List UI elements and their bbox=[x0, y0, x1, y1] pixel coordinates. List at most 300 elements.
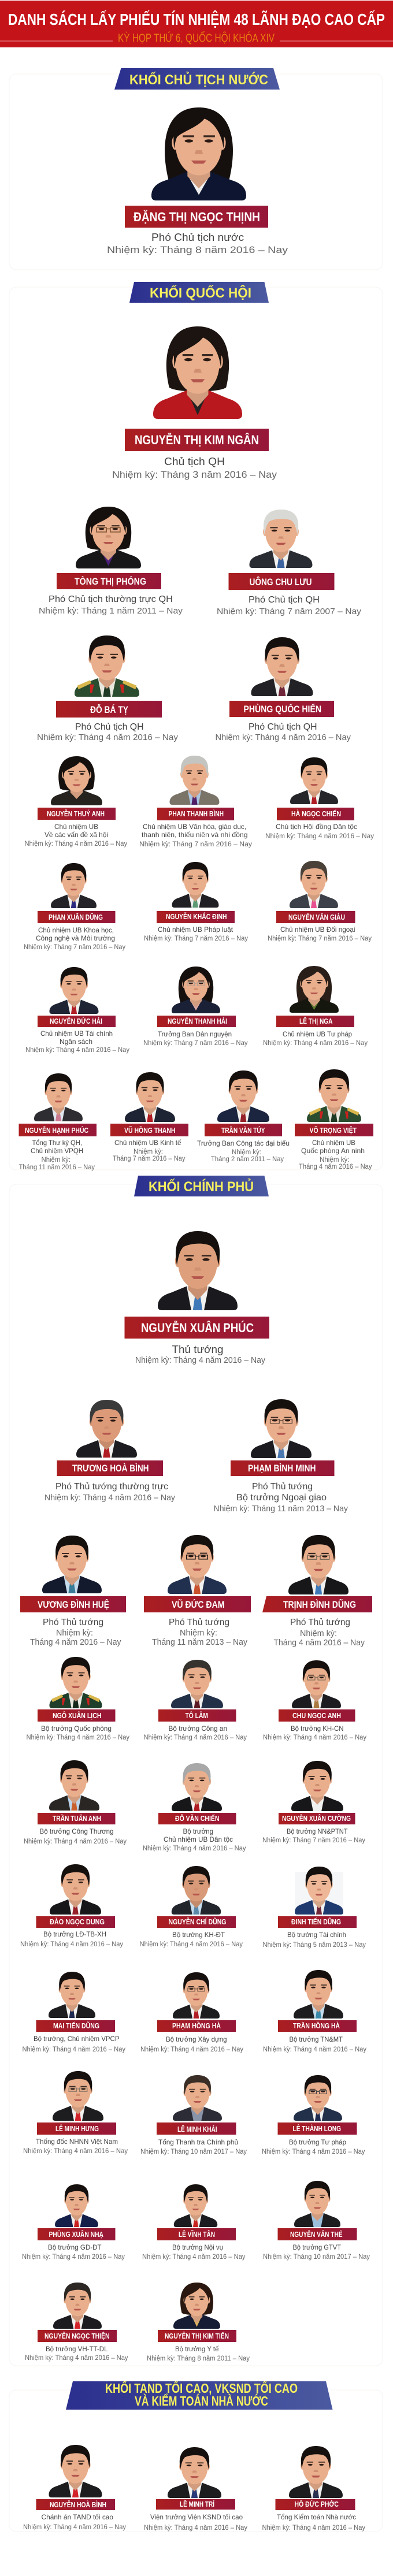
portrait bbox=[51, 756, 102, 805]
name bar bbox=[279, 1813, 355, 1824]
role and term bbox=[25, 2345, 128, 2362]
role and term bbox=[23, 2138, 128, 2155]
role and term bbox=[152, 1618, 247, 1647]
name bar: NGUYỄN ĐỨC HẢI bbox=[50, 1017, 102, 1025]
name bar bbox=[157, 2228, 236, 2240]
role and term: Trưởng Ban Dân nguyện bbox=[158, 1030, 232, 1038]
role and term: Nhiệm kỳ: Tháng 4 năm 2016 – Nay bbox=[142, 2254, 246, 2261]
role and term: Nhiệm kỳ: Tháng 4 năm 2016 – Nay bbox=[24, 841, 127, 847]
role and term: Nhiệm kỳ: bbox=[134, 1148, 163, 1155]
name bar bbox=[144, 1596, 251, 1612]
portrait bbox=[291, 1761, 343, 1811]
portrait bbox=[288, 1535, 348, 1594]
name bar bbox=[277, 2122, 357, 2135]
name bar bbox=[125, 429, 269, 451]
role and term: Nhiệm kỳ: bbox=[180, 1628, 217, 1638]
role and term: Chủ nhiệm UB Văn hóa, giáo dục, bbox=[143, 823, 246, 831]
portrait bbox=[49, 1972, 95, 2018]
role and term: Công nghệ và Môi trường bbox=[36, 934, 115, 942]
role and term bbox=[144, 925, 248, 942]
role and term bbox=[268, 925, 372, 942]
role and term: Chánh án TAND tối cao bbox=[42, 2513, 113, 2521]
name bar: PHÙNG XUÂN NHẠ bbox=[49, 2230, 103, 2239]
role and term: Trưởng Ban Công tác đại biểu bbox=[197, 1139, 290, 1147]
person: Nguyễn Hạnh Phúc bbox=[18, 1073, 97, 1171]
person: Phạm Hồng Hà bbox=[140, 1972, 243, 2053]
portrait bbox=[50, 1657, 102, 1708]
portrait bbox=[168, 1535, 227, 1594]
role and term: Nhiệm kỳ: Tháng 4 năm 2016 – Nay bbox=[143, 1734, 247, 1741]
portrait bbox=[290, 861, 338, 908]
section banner bbox=[129, 282, 269, 303]
role and term bbox=[143, 1724, 247, 1741]
name bar: NGUYỄN VĂN GIÀU bbox=[288, 913, 345, 921]
role and term bbox=[24, 823, 127, 847]
person: Võ Trọng Việt bbox=[295, 1069, 373, 1170]
role and term: Bộ trưởng GTVT bbox=[292, 2243, 342, 2251]
role and term: Chủ nhiệm UB bbox=[54, 823, 98, 831]
name bar: LÊ VĨNH TÂN bbox=[179, 2230, 215, 2239]
name bar bbox=[158, 1813, 236, 1824]
person: Lê Vĩnh Tân bbox=[142, 2184, 246, 2261]
role and term: Nhiệm kỳ: Tháng 4 năm 2016 – Nay bbox=[27, 1734, 129, 1741]
portrait bbox=[295, 1867, 343, 1915]
role and term bbox=[37, 722, 179, 742]
role and term bbox=[144, 2513, 247, 2532]
role and term bbox=[20, 1930, 123, 1948]
name bar bbox=[156, 2499, 235, 2510]
role and term: Chủ nhiệm UB Khoa học, bbox=[38, 926, 114, 934]
name bar: VÕ TRỌNG VIỆT bbox=[310, 1126, 357, 1135]
role and term: Nhiệm kỳ: Tháng 11 năm 2013 – Nay bbox=[214, 1504, 348, 1514]
role and term: Nhiệm kỳ: Tháng 7 năm 2016 – Nay bbox=[268, 935, 372, 942]
role and term: Bộ trưởng TN&MT bbox=[289, 2035, 343, 2043]
role and term: Nhiệm kỳ: Tháng 7 năm 2016 – Nay bbox=[24, 944, 125, 951]
role and term: Phó Thủ tướng bbox=[252, 1482, 313, 1492]
name bar: CHU NGỌC ANH bbox=[292, 1712, 341, 1720]
name bar: UÔNG CHU LƯU bbox=[250, 577, 312, 588]
role and term: Nhiệm kỳ: Tháng 4 năm 2016 – Nay bbox=[263, 2046, 366, 2053]
person: Mai Tiến Dũng bbox=[22, 1972, 125, 2053]
role and term: thanh niên, thiếu niên và nhi đồng bbox=[142, 831, 247, 839]
role and term bbox=[142, 2243, 246, 2261]
name bar: LÊ THÀNH LONG bbox=[292, 2124, 341, 2133]
name bar bbox=[277, 2228, 357, 2240]
portrait bbox=[50, 1864, 101, 1915]
role and term: Nhiệm kỳ: Tháng 4 năm 2016 – Nay bbox=[37, 733, 179, 742]
person: Nguyễn Xuân Phúc bbox=[125, 1231, 269, 1365]
section banner: KHỐI QUỐC HỘI bbox=[150, 285, 251, 301]
portrait bbox=[151, 107, 246, 200]
panel: Khối Quốc hội bbox=[9, 282, 383, 1171]
person: Trịnh Đình Dũng bbox=[262, 1535, 372, 1648]
role and term: Nhiệm kỳ: Tháng 4 năm 2016 – Nay bbox=[140, 2046, 243, 2053]
header band bbox=[0, 1, 393, 47]
role and term: Nhiệm kỳ: Tháng 4 năm 2016 – Nay bbox=[25, 2355, 128, 2362]
role and term: Nhiệm kỳ: Tháng 10 năm 2017 – Nay bbox=[263, 2254, 370, 2261]
person: Lê Thành Long bbox=[262, 2075, 365, 2155]
person: Lê Minh Khái bbox=[140, 2075, 247, 2155]
person: Đỗ Văn Chiến bbox=[143, 1763, 246, 1852]
name bar bbox=[38, 808, 116, 820]
portrait bbox=[251, 637, 313, 696]
person: Phùng Xuân Nhạ bbox=[22, 2184, 125, 2261]
role and term: Bộ trưởng Quốc phòng bbox=[41, 1724, 112, 1733]
portrait bbox=[173, 2283, 220, 2329]
person: Nguyễn Chí Dũng bbox=[140, 1866, 243, 1948]
person: Chu Ngọc Anh bbox=[263, 1660, 366, 1741]
panel: Khối Chủ tịch nước bbox=[9, 68, 383, 270]
person: Vương Đình Huệ bbox=[20, 1536, 126, 1647]
portrait bbox=[49, 2445, 102, 2497]
name bar: NGÔ XUÂN LỊCH bbox=[53, 1711, 102, 1720]
section banner: KHỐI TAND TỐI CAO, VKSND TỐI CAO bbox=[105, 2380, 298, 2396]
name bar: HÀ NGỌC CHIẾN bbox=[291, 809, 341, 818]
name bar bbox=[229, 573, 334, 590]
portrait bbox=[76, 507, 141, 568]
portrait bbox=[172, 1866, 221, 1915]
role and term: Nhiệm kỳ: Tháng 7 năm 2016 – Nay bbox=[262, 1837, 365, 1844]
role and term: Bộ trưởng bbox=[183, 1827, 213, 1835]
person: Trần Hồng Hà bbox=[263, 1970, 366, 2053]
role and term bbox=[140, 2138, 247, 2155]
role and term: Tháng 7 năm 2016 – Nay bbox=[113, 1155, 186, 1162]
person: Nguyễn Thanh Hải bbox=[143, 967, 248, 1047]
person: Lê Minh Trí bbox=[144, 2447, 247, 2532]
person: Nguyễn Thị Kim Tiến bbox=[147, 2283, 250, 2362]
name bar bbox=[229, 701, 334, 717]
role and term: Tháng 4 năm 2016 – Nay bbox=[299, 1164, 372, 1170]
role and term: Nhiệm kỳ: bbox=[56, 1628, 93, 1638]
role and term bbox=[113, 1139, 186, 1162]
role and term: Nhiệm kỳ: Tháng 4 năm 2016 – Nay bbox=[22, 2254, 125, 2261]
name bar bbox=[295, 1124, 373, 1136]
portrait bbox=[158, 1231, 238, 1310]
person: Phùng Quốc Hiển bbox=[215, 637, 351, 742]
role and term: Nhiệm kỳ: Tháng 7 năm 2016 – Nay bbox=[143, 1040, 248, 1047]
role and term bbox=[263, 1030, 368, 1047]
person: Đinh Tiến Dũng bbox=[262, 1867, 366, 1949]
role and term: Bộ trưởng Công an bbox=[169, 1724, 227, 1733]
name bar bbox=[18, 1124, 97, 1136]
name bar bbox=[279, 1709, 355, 1722]
role and term: Phó Thủ tướng bbox=[290, 1618, 350, 1627]
person: Trương Hòa Bình bbox=[45, 1400, 175, 1503]
role and term: Tháng 2 năm 2011 – Nay bbox=[211, 1156, 284, 1163]
person: Đỗ Bá Tỵ bbox=[37, 635, 179, 742]
name bar bbox=[38, 2330, 117, 2342]
portrait bbox=[250, 510, 312, 568]
role and term: Nhiệm kỳ: Tháng 4 năm 2016 – Nay bbox=[23, 2524, 126, 2531]
person: Nguyễn Thúy Anh bbox=[24, 756, 127, 847]
role and term: Nhiệm kỳ: bbox=[232, 1149, 261, 1156]
name bar bbox=[205, 1124, 282, 1136]
name bar: VŨ ĐỨC ĐAM bbox=[172, 1599, 224, 1610]
role and term bbox=[147, 2345, 250, 2362]
role and term: Nhiệm kỳ: Tháng 4 năm 2016 – Nay bbox=[22, 2046, 125, 2053]
name bar: ĐÀO NGỌC DUNG bbox=[50, 1917, 105, 1926]
role and term bbox=[274, 1618, 365, 1648]
name bar: TÔ LÂM bbox=[185, 1711, 208, 1720]
portrait bbox=[172, 967, 220, 1013]
name bar: PHAN THANH BÌNH bbox=[169, 809, 224, 818]
portrait bbox=[53, 2071, 103, 2121]
person: Vũ Hồng Thanh bbox=[110, 1072, 188, 1162]
person: Nguyễn Ngọc Thiện bbox=[25, 2283, 128, 2362]
portrait bbox=[217, 1070, 269, 1122]
role and term bbox=[45, 1482, 175, 1503]
name bar bbox=[157, 2122, 236, 2135]
name bar: NGUYỄN HOÀ BÌNH bbox=[50, 2500, 106, 2509]
role and term: Nhiệm kỳ: Tháng 1 năm 2011 – Nay bbox=[39, 606, 183, 616]
name bar: ĐẶNG THỊ NGỌC THỊNH bbox=[134, 210, 260, 224]
role and term bbox=[140, 2035, 243, 2053]
name bar bbox=[20, 1596, 126, 1612]
role and term: Chủ nhiệm UB Tư pháp bbox=[283, 1030, 352, 1038]
name bar bbox=[36, 2020, 115, 2032]
name bar bbox=[276, 911, 355, 923]
portrait bbox=[174, 2184, 217, 2227]
role and term bbox=[262, 2513, 365, 2532]
person: Nguyễn Văn Giàu bbox=[268, 861, 372, 942]
role and term: Nhiệm kỳ: Tháng 4 năm 2016 – Nay bbox=[262, 2525, 365, 2532]
role and term: Phó Thủ tướng thường trực bbox=[55, 1482, 168, 1492]
portrait bbox=[53, 2283, 102, 2329]
name bar: ĐỖ BÁ TỴ bbox=[90, 704, 129, 715]
role and term: Nhiệm kỳ: Tháng 4 năm 2016 – Nay bbox=[263, 1734, 366, 1741]
person: Tô Lâm bbox=[143, 1660, 247, 1741]
role and term: Nhiệm kỳ: Tháng 4 năm 2016 – Nay bbox=[215, 733, 351, 742]
role and term: Viện trưởng Viện KSND tối cao bbox=[150, 2513, 243, 2521]
person: Nguyễn Thị Kim Ngân bbox=[112, 326, 277, 480]
person: Phan Xuân Dũng bbox=[24, 863, 125, 951]
portrait bbox=[76, 1400, 137, 1458]
portrait bbox=[173, 2075, 222, 2121]
name bar: NGUYỄN NGỌC THIỆN bbox=[45, 2332, 110, 2340]
role and term bbox=[263, 2243, 370, 2261]
portrait bbox=[171, 1660, 223, 1708]
role and term: Chủ tịch Hội đồng Dân tộc bbox=[276, 823, 357, 831]
person: Ngô Xuân Lịch bbox=[27, 1657, 129, 1741]
person: Phan Thanh Bình bbox=[139, 756, 252, 848]
role and term: Nhiệm kỳ: bbox=[42, 1157, 71, 1164]
name bar bbox=[278, 2020, 357, 2032]
role and term: Chủ nhiệm UB Đối ngoại bbox=[280, 925, 355, 934]
name bar bbox=[277, 808, 354, 820]
name bar bbox=[158, 1709, 236, 1722]
person: Nguyễn Văn Thể bbox=[263, 2181, 370, 2261]
role and term bbox=[27, 1724, 129, 1741]
portrait bbox=[168, 2447, 221, 2498]
name bar bbox=[36, 1916, 115, 1928]
role and term: Nhiệm kỳ: Tháng 4 năm 2016 – Nay bbox=[265, 833, 374, 840]
role and term: Tháng 4 năm 2016 – Nay bbox=[30, 1637, 121, 1647]
name bar: LÊ MINH HƯNG bbox=[55, 2124, 99, 2133]
name bar: LÊ MINH TRÍ bbox=[180, 2500, 214, 2508]
role and term: Nhiệm kỳ: Tháng 10 năm 2017 – Nay bbox=[140, 2148, 247, 2155]
name bar: NGUYỄN THỊ KIM TIẾN bbox=[165, 2332, 229, 2340]
name bar: MAI TIẾN DŨNG bbox=[53, 2021, 99, 2030]
name bar bbox=[157, 1016, 236, 1027]
role and term bbox=[263, 2035, 366, 2053]
name bar: PHAN XUÂN DŨNG bbox=[49, 913, 103, 921]
name bar bbox=[262, 1596, 372, 1612]
portrait bbox=[42, 1536, 102, 1593]
section banner bbox=[114, 68, 280, 90]
role and term: Bộ trưởng Tư pháp bbox=[289, 2138, 346, 2146]
role and term: Phó Chủ tịch QH bbox=[249, 722, 317, 732]
role and term: Tổng Thanh tra Chính phủ bbox=[158, 2138, 238, 2146]
person: Nguyễn Hòa Bình bbox=[23, 2445, 126, 2531]
name bar bbox=[157, 1916, 236, 1928]
panel: Khối Chính phủ bbox=[9, 1176, 383, 2366]
role and term: Nhiệm kỳ: Tháng 4 năm 2016 – Nay bbox=[25, 1047, 129, 1054]
person: Uông Chu Lưu bbox=[217, 510, 362, 616]
role and term: Nhiệm kỳ: Tháng 4 năm 2016 – Nay bbox=[45, 1493, 175, 1503]
role and term: Nhiệm kỳ: Tháng 4 năm 2016 – Nay bbox=[263, 1040, 368, 1047]
role and term bbox=[107, 232, 288, 255]
portrait bbox=[49, 1760, 99, 1811]
name bar bbox=[57, 573, 161, 589]
person: Hồ Đức Phớc bbox=[262, 2446, 365, 2532]
name bar bbox=[36, 2499, 115, 2510]
role and term: Thống đốc NHNN Việt Nam bbox=[36, 2138, 118, 2146]
section banner: VÀ KIỂM TOÁN NHÀ NƯỚC bbox=[135, 2393, 268, 2408]
role and term: Nhiệm kỳ: Tháng 4 năm 2016 – Nay bbox=[143, 1845, 246, 1852]
role and term bbox=[24, 1827, 127, 1845]
role and term bbox=[262, 1827, 365, 1844]
role and term: Nhiệm kỳ: Tháng 4 năm 2016 – Nay bbox=[144, 2525, 247, 2532]
name bar: NGUYỄN KHẮC ĐỊNH bbox=[166, 912, 227, 921]
role and term: Tháng 11 năm 2013 – Nay bbox=[152, 1637, 247, 1647]
portrait bbox=[292, 1660, 341, 1708]
role and term bbox=[217, 595, 362, 616]
portrait bbox=[294, 2075, 342, 2121]
name bar: NGUYỄN HẠNH PHÚC bbox=[25, 1126, 88, 1135]
role and term: Nhiệm kỳ: Tháng 4 năm 2016 – Nay bbox=[23, 2148, 128, 2155]
role and term: Chủ nhiệm UB Tài chính bbox=[40, 1029, 113, 1038]
name bar bbox=[157, 2020, 236, 2032]
role and term bbox=[25, 1029, 129, 1054]
name bar bbox=[278, 1916, 357, 1928]
person: Nguyễn Khắc Định bbox=[144, 862, 248, 942]
role and term: Nhiệm kỳ: Tháng 7 năm 2007 – Nay bbox=[217, 607, 362, 616]
role and term: Chủ nhiệm UB Pháp luật bbox=[158, 925, 233, 934]
name bar: NGUYỄN THANH HẢI bbox=[168, 1017, 227, 1025]
portrait bbox=[153, 326, 242, 419]
name bar bbox=[38, 1016, 116, 1027]
role and term: Nhiệm kỳ: Tháng 4 năm 2016 – Nay bbox=[140, 1941, 243, 1948]
portrait bbox=[50, 967, 98, 1014]
role and term bbox=[39, 594, 183, 616]
role and term: Chủ tịch QH bbox=[164, 456, 225, 467]
name bar: NGUYỄN VĂN THỂ bbox=[290, 2230, 342, 2239]
person: Hà Ngọc Chiến bbox=[265, 757, 374, 840]
name bar: TÒNG THỊ PHÓNG bbox=[75, 576, 146, 587]
role and term: Bộ trưởng Công Thương bbox=[39, 1827, 113, 1835]
portrait bbox=[172, 862, 218, 908]
role and term: Phó Thủ tướng bbox=[169, 1618, 229, 1627]
role and term: Quốc phòng An ninh bbox=[301, 1147, 365, 1155]
portrait bbox=[34, 1073, 83, 1121]
portrait bbox=[172, 1763, 222, 1811]
name bar bbox=[125, 1317, 269, 1339]
section banner bbox=[134, 1176, 269, 1196]
name bar: PHẠM HỒNG HÀ bbox=[172, 2021, 221, 2030]
role and term bbox=[24, 926, 125, 951]
role and term: Bộ trưởng LĐ-TB-XH bbox=[43, 1930, 106, 1938]
subtitle: KỲ HỌP THỨ 6, QUỐC HỘI KHÓA XIV bbox=[118, 31, 275, 45]
role and term: Ngân sách bbox=[60, 1038, 92, 1046]
role and term: Phó Chủ tịch nước bbox=[151, 232, 244, 243]
role and term: Nhiệm kỳ: Tháng 4 năm 2016 – Nay bbox=[20, 1941, 123, 1948]
role and term: Tổng Kiểm toán Nhà nước bbox=[277, 2513, 356, 2521]
name bar bbox=[38, 2228, 116, 2240]
role and term bbox=[214, 1482, 348, 1514]
person: Vũ Đức Đam bbox=[144, 1535, 251, 1647]
role and term bbox=[135, 1344, 265, 1365]
person: Nguyễn Đức Hải bbox=[25, 967, 129, 1054]
role and term: Nhiệm kỳ: bbox=[320, 1157, 349, 1164]
person: Đào Ngọc Dung bbox=[20, 1864, 123, 1948]
role and term bbox=[23, 2513, 126, 2531]
name bar: PHẠM BÌNH MINH bbox=[248, 1463, 316, 1474]
name bar bbox=[38, 1709, 116, 1722]
person: Đặng Thị Ngọc Thịnh bbox=[107, 107, 288, 255]
role and term: Chủ nhiệm UB Kinh tế bbox=[114, 1139, 181, 1147]
role and term: Phó Chủ tịch QH bbox=[249, 595, 320, 605]
portrait bbox=[294, 1970, 343, 2019]
name bar: NGUYỄN XUÂN CƯỜNG bbox=[282, 1814, 351, 1823]
role and term bbox=[30, 1618, 121, 1647]
role and term: Nhiệm kỳ: Tháng 3 năm 2016 – Nay bbox=[112, 469, 277, 480]
role and term bbox=[215, 722, 351, 742]
role and term: Nhiệm kỳ: Tháng 8 năm 2011 – Nay bbox=[147, 2355, 250, 2362]
name bar: NGUYỄN THỊ KIM NGÂN bbox=[135, 432, 259, 447]
role and term bbox=[143, 1827, 246, 1852]
role and term: Bộ trưởng KH-CN bbox=[291, 1724, 343, 1733]
role and term: Nhiệm kỳ: Tháng 4 năm 2016 – Nay bbox=[24, 1838, 127, 1845]
portrait bbox=[294, 2181, 340, 2227]
name bar bbox=[38, 911, 116, 923]
person: Nguyễn Xuân Cường bbox=[262, 1761, 365, 1844]
name bar: TRẦN VĂN TÚY bbox=[221, 1126, 265, 1135]
person: Trần Tuấn Anh bbox=[24, 1760, 127, 1845]
role and term: Nhiệm kỳ: Tháng 8 năm 2016 – Nay bbox=[107, 244, 288, 255]
name bar bbox=[110, 1124, 188, 1136]
role and term: Bộ trưởng GD-ĐT bbox=[48, 2243, 102, 2251]
role and term: Nhiệm kỳ: Tháng 5 năm 2013 – Nay bbox=[262, 1942, 366, 1949]
portrait bbox=[289, 2446, 343, 2498]
role and term: Nhiệm kỳ: Tháng 7 năm 2016 – Nay bbox=[144, 935, 248, 942]
person: Lê Minh Hưng bbox=[23, 2071, 128, 2155]
role and term: Phó Chủ tịch thường trực QH bbox=[49, 594, 173, 604]
name bar bbox=[56, 701, 162, 718]
role and term: Bộ trưởng, Chủ nhiệm VPCP bbox=[34, 2035, 119, 2043]
name bar bbox=[57, 1460, 163, 1476]
role and term: Nhiệm kỳ: bbox=[300, 1629, 337, 1638]
name bar: TRẦN HỒNG HÀ bbox=[293, 2021, 340, 2030]
person: Tòng Thị Phóng bbox=[39, 507, 183, 616]
name bar: PHÙNG QUỐC HIỂN bbox=[244, 703, 321, 715]
role and term bbox=[197, 1139, 290, 1163]
role and term bbox=[262, 2138, 365, 2155]
role and term: Tháng 4 năm 2016 – Nay bbox=[274, 1638, 365, 1648]
role and term bbox=[263, 1724, 366, 1741]
role and term: Bộ trưởng NN&PTNT bbox=[287, 1827, 348, 1835]
name bar: HỒ ĐỨC PHỚC bbox=[295, 2500, 339, 2508]
name bar bbox=[38, 1813, 116, 1824]
